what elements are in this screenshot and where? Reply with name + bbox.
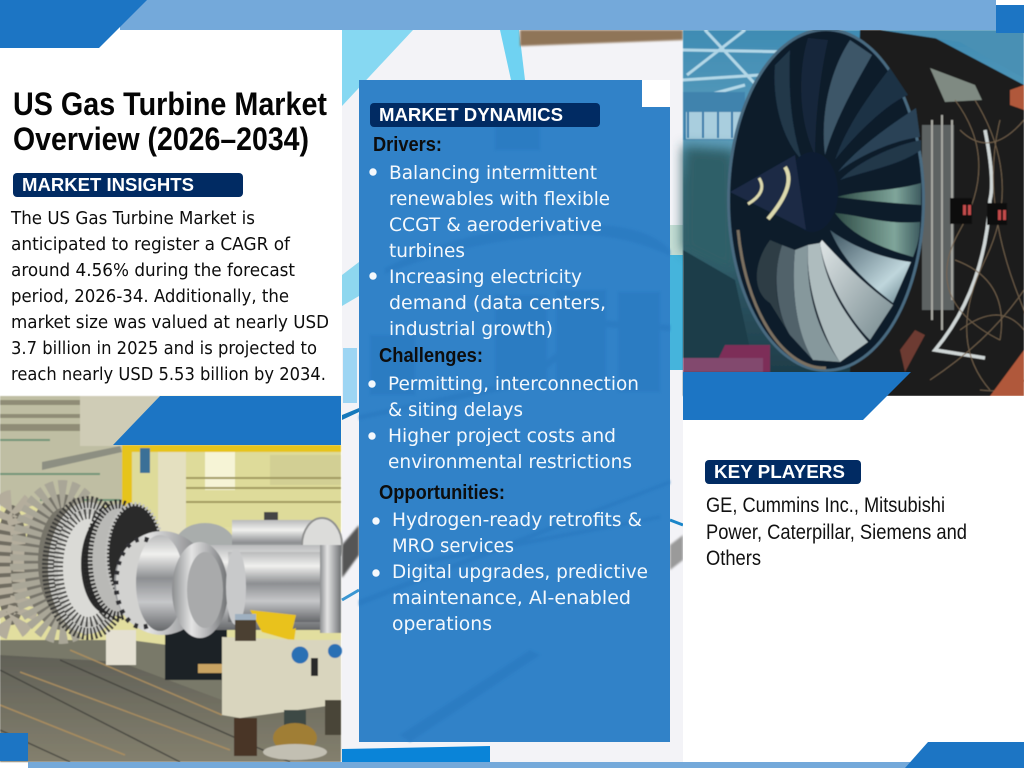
text block: opportunities: Opportunities:: [379, 482, 505, 504]
heading: key players: [705, 460, 861, 484]
text block: challenges: environmental restrictions: [388, 451, 632, 473]
title: Overview (2026–2034): [13, 121, 309, 157]
rear rotor: [175, 523, 235, 567]
text block: opportunities: Hydrogen-ready retrofits &: [392, 509, 642, 531]
banner: white area below right photo: [683, 396, 1024, 596]
top ribbon: [0, 0, 1024, 48]
text block: opportunities: operations: [392, 613, 492, 635]
text block: opportunities: Digital upgrades, predictive: [392, 561, 648, 583]
heading: market insights: MARKET INSIGHTS: [22, 175, 194, 195]
dark base under rotor: [165, 625, 227, 680]
text block: opportunities: MRO services: [392, 535, 514, 557]
engine body: [830, 30, 1024, 396]
text block: drivers: Balancing intermittent: [389, 162, 597, 184]
panel: market dynamics background: [359, 80, 670, 742]
heading: key players: KEY PLAYERS: [714, 462, 845, 482]
text block: key players: GE, Cummins Inc., Mitsubishi: [706, 494, 945, 517]
text block: key players: [706, 494, 967, 570]
text block: challenges: [368, 345, 639, 473]
turbine blade disks: [0, 494, 163, 634]
text block: market insights: [10, 208, 329, 385]
text block: market insights: anticipated to register a CAGR of: [11, 234, 291, 255]
polished shaft: [114, 531, 341, 638]
text block: market insights: period, 2026-34. Additionally, the: [11, 286, 289, 307]
image: jet turbine engine: [683, 28, 1024, 396]
text block: market insights: market size was valued at nearly USD: [11, 312, 329, 333]
text block: drivers: [369, 134, 610, 340]
heading: market dynamics: MARKET DYNAMICS: [379, 105, 563, 125]
text block: challenges: Challenges:: [379, 345, 483, 367]
background image: blurred charts behind dynamics panel: [342, 30, 683, 762]
text block: drivers: demand (data centers,: [389, 292, 606, 314]
text block: drivers: Drivers:: [373, 134, 442, 156]
text block: opportunities: maintenance, AI-enabled: [392, 587, 631, 609]
image: industrial gas turbine rotor in workshop: [0, 396, 342, 762]
text block: market insights: around 4.56% during the forecast: [11, 260, 295, 281]
text block: drivers: Increasing electricity: [389, 266, 582, 288]
text block: challenges: Permitting, interconnection: [388, 373, 639, 395]
banner: blue shape over right photo: [683, 372, 911, 420]
text block: market insights: 3.7 billion in 2025 and is projected to: [11, 338, 317, 359]
text block: drivers: renewables with flexible: [389, 188, 610, 210]
text block: opportunities: [372, 482, 648, 635]
yellow bracket: [250, 610, 296, 640]
title: US Gas Turbine Market: [13, 86, 327, 122]
nose cone: [730, 152, 838, 232]
text block: drivers: industrial growth): [389, 318, 553, 340]
title: [13, 86, 327, 157]
fan blades: [757, 38, 921, 362]
fan casing and rim: [727, 28, 925, 372]
cut-out corner square: [642, 80, 670, 107]
heading: market insights: [13, 173, 243, 197]
text block: market insights: reach nearly USD 5.53 billion by 2034.: [11, 364, 326, 385]
text block: key players: Others: [706, 547, 761, 570]
bottom ribbon: [0, 733, 1024, 768]
banner: blue shape over left photo: [113, 396, 341, 445]
text block: market insights: The US Gas Turbine Market is: [10, 208, 255, 229]
text block: challenges: & siting delays: [388, 399, 523, 421]
heading: market dynamics: [370, 103, 600, 127]
text block: drivers: CCGT & aeroderivative: [389, 214, 602, 236]
faint chart shapes in panel: [359, 125, 670, 742]
text block: key players: Power, Caterpillar, Siemens and: [706, 521, 967, 544]
text block: challenges: Higher project costs and: [388, 425, 616, 447]
text block: drivers: turbines: [389, 240, 465, 262]
concrete support block: [222, 637, 341, 718]
